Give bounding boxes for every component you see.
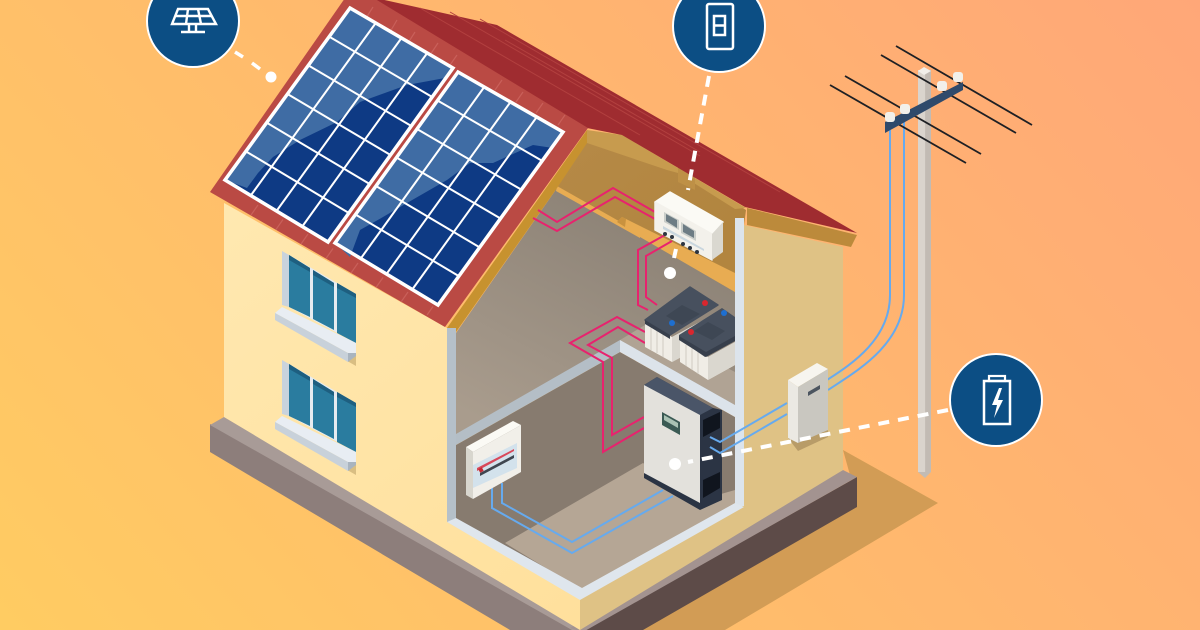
icon: solar panel badge xyxy=(147,0,239,67)
left roof slope xyxy=(210,0,588,327)
pink wiring xyxy=(533,188,672,452)
ground shadow xyxy=(640,450,938,630)
leader dot: inverter xyxy=(669,458,681,470)
battery one xyxy=(645,287,722,362)
icon: wall switch badge xyxy=(673,0,765,72)
leader dot: controller xyxy=(664,267,676,279)
battery two xyxy=(679,308,735,380)
roof xyxy=(210,0,857,327)
solar panel: right xyxy=(335,72,563,305)
dashed leader: controller icon xyxy=(674,76,709,258)
dashed leader: battery icon xyxy=(688,410,948,462)
blue wiring xyxy=(492,122,904,553)
foundation xyxy=(210,417,857,630)
lower window xyxy=(275,360,356,475)
upper window xyxy=(275,251,356,366)
dashed leader: solar badge xyxy=(235,52,276,82)
right roof slope xyxy=(362,0,857,233)
solar panel: left xyxy=(225,8,453,242)
charge controller xyxy=(655,192,723,260)
meter box xyxy=(788,363,828,451)
floor slab and wall frame xyxy=(447,218,744,600)
house walls xyxy=(224,203,843,630)
power lines and crossarm xyxy=(830,46,1032,163)
inverter xyxy=(644,377,722,510)
batteries xyxy=(645,287,735,380)
wires from inverter to meter xyxy=(710,403,787,453)
distribution panel xyxy=(466,421,521,499)
utility pole xyxy=(918,67,931,478)
interior: attic, upper room, lower room xyxy=(447,130,746,590)
icon: battery badge xyxy=(950,354,1042,446)
eave underside xyxy=(747,208,857,247)
